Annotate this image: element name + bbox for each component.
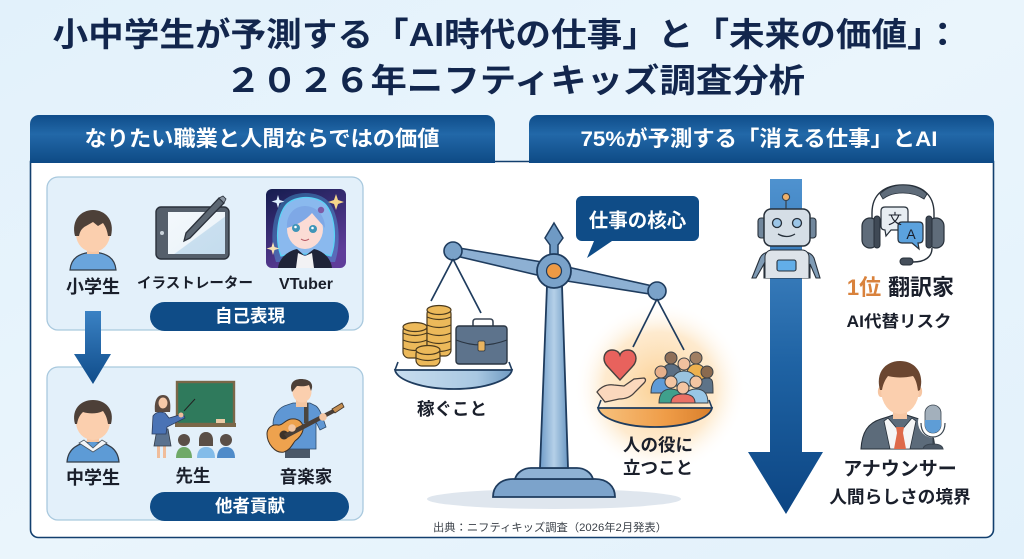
source note: 出典：ニフティキッズ調査（2026年2月発表） — [433, 520, 667, 534]
tab heading: right: 75%が予測する「消える仕事」とAI — [580, 126, 938, 151]
label: boundary of humanity: 人間らしさの境界 — [829, 487, 971, 507]
label: earning money: 稼ぐこと — [417, 399, 487, 419]
label: helping people — [623, 435, 693, 478]
icon: translator headset: A — [906, 226, 916, 242]
icon: group of people — [651, 352, 713, 403]
icon: coins — [403, 306, 451, 366]
icon: translator headset: 文 — [888, 211, 902, 227]
base — [493, 479, 615, 497]
arrow: elementary to junior high — [74, 311, 111, 384]
main white panel — [30, 162, 994, 538]
chart: balance scale — [395, 223, 746, 509]
icon: translator headset — [862, 185, 944, 265]
label: illustrator: イラストレーター — [137, 275, 253, 292]
shadow — [427, 489, 681, 509]
icon: junior high student — [67, 400, 119, 462]
label: helping people: 立つこと — [623, 458, 693, 478]
finial — [545, 223, 563, 255]
callout: core of work — [576, 196, 699, 258]
label: AI replacement risk: AI代替リスク — [846, 312, 952, 331]
icon: briefcase — [456, 319, 507, 364]
icon: announcer — [861, 361, 950, 449]
glow — [574, 302, 746, 474]
title: 小中学生が予測する「AI時代の仕事」と「未来の価値」： — [52, 16, 960, 53]
icon: musician with guitar — [267, 379, 344, 458]
label: rank 1 translator: 1位 — [847, 275, 881, 300]
label: junior high: 中学生 — [66, 467, 120, 488]
icon: heart on hand — [597, 350, 646, 402]
arrow: large downward — [748, 179, 823, 514]
tab heading: left — [30, 115, 495, 163]
pillar — [540, 285, 568, 468]
icon: elementary student — [70, 210, 116, 270]
strings — [431, 259, 684, 350]
left pan — [395, 362, 512, 389]
callout: core of work: 仕事の核心 — [589, 210, 687, 232]
label: announcer: アナウンサー — [843, 458, 957, 480]
right pan — [598, 400, 712, 427]
label: teacher: 先生 — [176, 466, 210, 486]
icon: robot — [752, 193, 820, 278]
icon: drawing tablet — [156, 196, 229, 259]
label: rank 1 translator: 翻訳家 — [888, 275, 954, 300]
tab heading: right — [529, 115, 994, 163]
pill: self expression: 自己表現 — [215, 306, 285, 326]
pill: contribution to others: 他者貢献 — [215, 496, 285, 516]
pill: contribution to others — [150, 492, 349, 521]
hub — [537, 254, 571, 288]
tab heading: left: なりたい職業と人間ならではの価値 — [84, 127, 440, 151]
label: helping people: 人の役に — [623, 435, 693, 455]
icon: VTuber portrait — [266, 189, 346, 268]
icon: teacher and chalkboard — [152, 382, 236, 458]
label: musician: 音楽家 — [280, 467, 332, 487]
label: VTuber: VTuber — [279, 276, 333, 293]
panel: junior high school — [47, 367, 363, 521]
panel: elementary school — [47, 177, 363, 331]
label: rank 1 translator — [847, 275, 954, 300]
title: ２０２６年ニフティキッズ調査分析 — [225, 62, 805, 99]
title — [52, 16, 960, 99]
label: elementary: 小学生 — [66, 276, 120, 297]
beam — [452, 247, 657, 295]
pill: self expression — [150, 302, 349, 331]
